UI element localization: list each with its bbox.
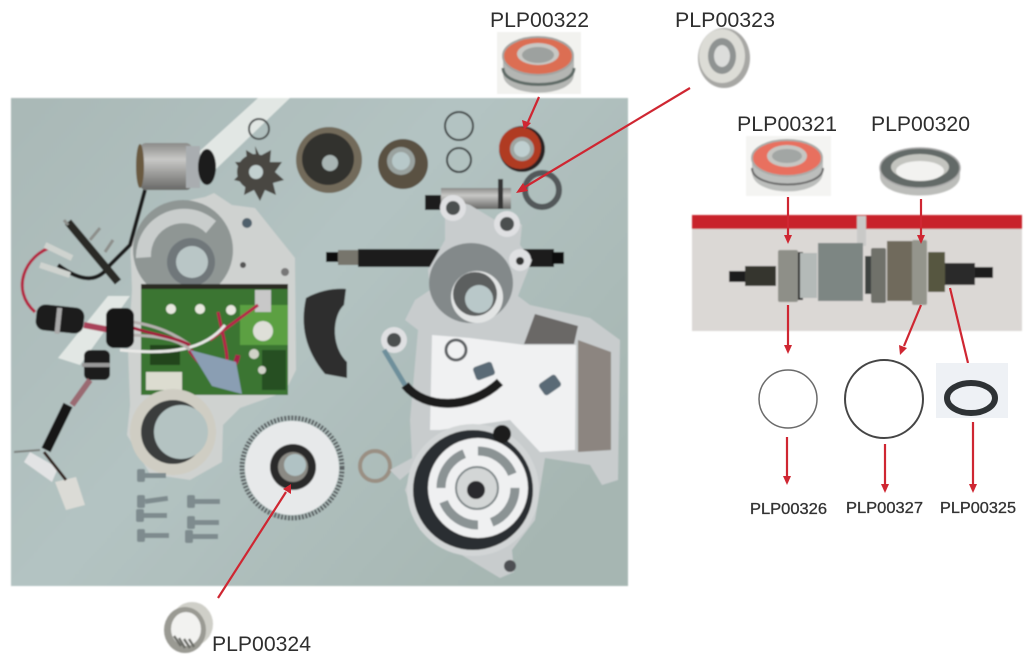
label: PLP00327: PLP00327 (846, 500, 923, 517)
circuit board (120, 284, 288, 395)
left housing plate (127, 193, 296, 480)
arrow: PLP00325 (950, 288, 968, 363)
arrows (218, 88, 977, 598)
shaft assembly (729, 216, 993, 305)
arrow: PLP00321 (784, 197, 792, 244)
bearing image: PLP00322 (497, 32, 581, 94)
washer (360, 451, 390, 481)
arrow: PLP00327 (899, 305, 921, 355)
screws (136, 469, 220, 543)
seal ring (525, 173, 559, 207)
bearing image: PLP00324 (164, 602, 213, 653)
label: PLP00320: PLP00320 (871, 113, 970, 136)
lower bearing seat (130, 389, 216, 475)
arrow: PLP00320 (917, 199, 925, 244)
label: PLP00325: PLP00325 (940, 500, 1016, 517)
label: PLP00324: PLP00324 (212, 633, 311, 656)
arrow: PLP00326 down (784, 305, 792, 354)
O-ring: PLP00327 (845, 360, 923, 438)
bearing image: PLP00321 (746, 136, 831, 196)
light band (58, 98, 290, 365)
bearing on mat (499, 126, 545, 172)
arrow: PLP00327 label (881, 444, 889, 493)
gear wheel (242, 418, 342, 518)
arrow: PLP00326 label (783, 437, 791, 485)
label: PLP00321: PLP00321 (737, 113, 837, 136)
arrow: PLP00324 (218, 484, 291, 598)
sprocket (234, 146, 284, 201)
right housing (381, 195, 620, 578)
photo: disassembled motor (11, 98, 628, 586)
bearing image: PLP00320 (880, 148, 960, 196)
short shaft (425, 179, 511, 210)
crescent part (304, 289, 347, 378)
arrow: PLP00322 (522, 97, 539, 130)
O-ring: PLP00326 (759, 370, 817, 428)
arrow: PLP00323 (516, 88, 690, 193)
wiring harness (14, 190, 145, 510)
circlips (445, 112, 473, 172)
red strip (692, 215, 1022, 229)
motor cylinder (136, 143, 216, 190)
seal: PLP00325 (936, 363, 1008, 418)
bearing image: PLP00323 (698, 28, 750, 88)
labels (212, 9, 1016, 656)
long shaft (326, 249, 564, 267)
label: PLP00322: PLP00322 (490, 9, 589, 32)
label: PLP00326: PLP00326 (750, 501, 827, 518)
rotor bell (296, 127, 362, 193)
clutch part (378, 139, 428, 189)
arrow: PLP00325 label (969, 422, 977, 493)
photo: motor shaft (692, 215, 1022, 331)
label: PLP00323: PLP00323 (675, 9, 775, 32)
circlip (249, 119, 269, 139)
